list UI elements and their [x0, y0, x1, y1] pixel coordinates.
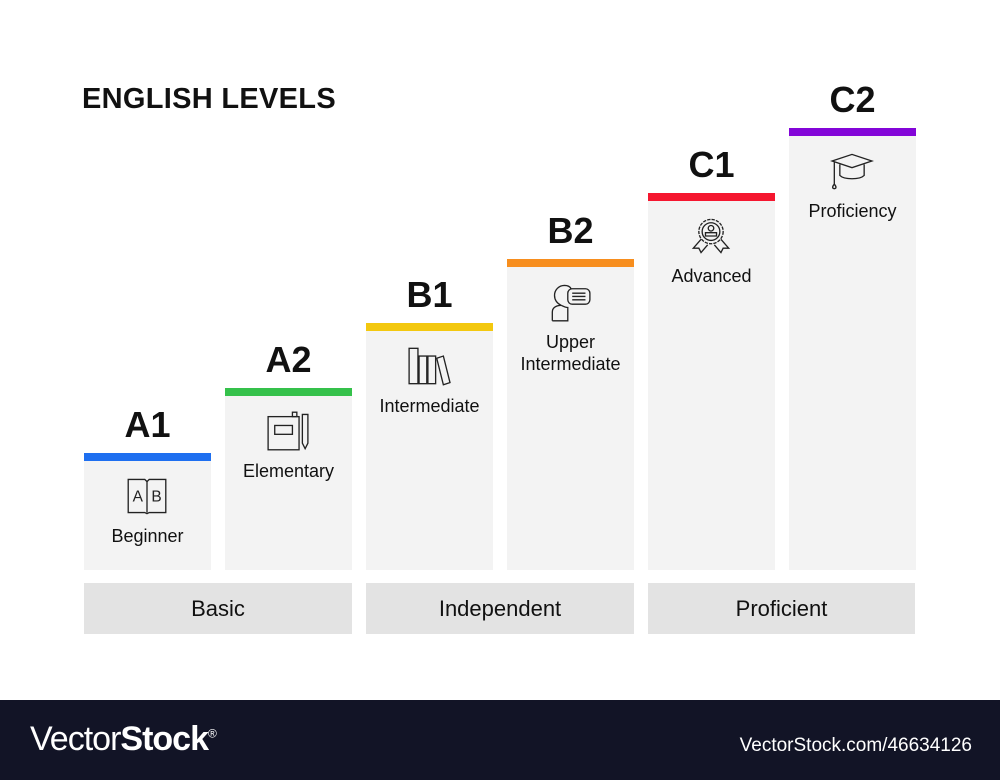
text: B2 [547, 210, 594, 251]
group: Independent [366, 583, 634, 634]
icon: graduation cap [830, 154, 874, 190]
footer url: VectorStock.com/46634126 [740, 735, 972, 756]
text: A1 [124, 404, 171, 445]
group: Basic [84, 583, 352, 634]
panel: C1: Advanced [671, 266, 752, 286]
footer [0, 700, 1000, 780]
group: Basic: Basic [191, 596, 245, 621]
icon: speaker [552, 284, 591, 322]
icon: notebook and pen [267, 412, 309, 450]
panel: B2 [507, 259, 634, 570]
icon: award badge [692, 218, 730, 254]
panel: C2: Proficiency [808, 201, 897, 221]
group: Proficient [648, 583, 915, 634]
group: Independent: Independent [439, 596, 561, 621]
panel: A1: Beginner [111, 526, 184, 546]
panel: B2: Upper [546, 332, 595, 352]
text: B1 [406, 274, 453, 315]
group: Proficient: Proficient [736, 596, 827, 621]
panel: C2 [789, 128, 916, 570]
panel: A1 [84, 453, 211, 570]
panel: B1 [366, 323, 493, 570]
icon: book AB: B [151, 489, 162, 506]
icon: books [408, 348, 451, 386]
icon: book AB: A [133, 489, 144, 506]
panel: B2: Intermediate [520, 354, 621, 374]
text: C1 [688, 144, 735, 185]
icon: book AB [128, 478, 166, 514]
panel: B1: Intermediate [379, 396, 480, 416]
panel: C1 [648, 193, 775, 570]
title: ENGLISH LEVELS [82, 83, 336, 115]
panel: A2 [225, 388, 352, 570]
text: A2 [265, 339, 312, 380]
panel: A2: Elementary [243, 461, 334, 481]
footer logo: VectorStock® [30, 720, 216, 758]
text: C2 [829, 79, 876, 120]
